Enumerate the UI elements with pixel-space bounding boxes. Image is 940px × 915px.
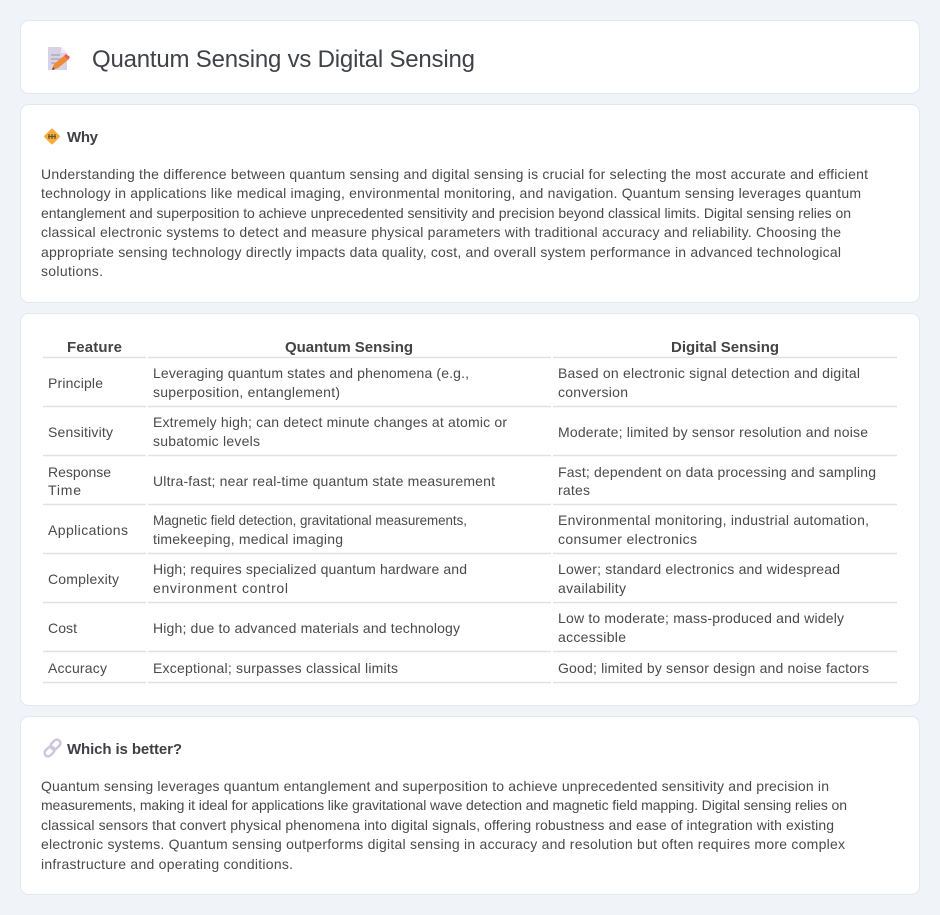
row: principle [48, 365, 860, 400]
row: accuracy: Good; limited by sensor design and noise factors [558, 660, 869, 676]
row: applications [48, 512, 869, 547]
row: applications: Applications [48, 522, 128, 538]
text block: which is better paragraph: measurements, making it ideal for applications like gravitational wave detection and magnetic field mapping. Digital sensing relies on [41, 797, 847, 813]
row: applications: consumer electronics [558, 531, 697, 547]
row: accuracy [48, 660, 869, 676]
icon: memo with pencil [48, 47, 70, 70]
text block: which is better paragraph [41, 778, 847, 872]
row: cost: Low to moderate; mass-produced and widely [558, 610, 844, 626]
row: applications: timekeeping, medical imaging [153, 531, 343, 547]
row: response time: Fast; dependent on data processing and sampling [558, 464, 876, 480]
row: principle: conversion [558, 384, 628, 400]
text block: why paragraph [41, 166, 868, 279]
table header: Feature [67, 339, 122, 356]
row: complexity [48, 561, 840, 596]
row: principle: superposition, entanglement) [153, 384, 340, 400]
icon: link [43, 738, 62, 758]
row: complexity: availability [558, 580, 626, 596]
heading: why: Why [67, 129, 99, 146]
row: response time: Time [48, 482, 81, 498]
text block: why paragraph: solutions. [41, 263, 103, 279]
row: accuracy: Exceptional; surpasses classical limits [153, 660, 398, 676]
text block: which is better paragraph: classical sensors that convert physical phenomena into digital signals, offering robustness and ease of integration with existing [41, 817, 834, 833]
row: sensitivity: Sensitivity [48, 424, 113, 440]
row: cost [48, 610, 844, 645]
text block: why paragraph: entanglement and superposition to achieve unprecedented sensitivity and precision beyond classical limits. Digital sensing relies on [41, 205, 851, 221]
row: sensitivity [48, 414, 868, 449]
row: response time [48, 464, 876, 498]
row: principle: Leveraging quantum states and phenomena (e.g., [153, 365, 469, 381]
row: principle: Principle [48, 375, 103, 391]
table rules [43, 358, 897, 682]
row: cost: High; due to advanced materials and technology [153, 620, 460, 636]
row: response time: Ultra-fast; near real-time quantum state measurement [153, 473, 495, 489]
panel: which is better [20, 716, 920, 894]
row: accuracy: Accuracy [48, 660, 107, 676]
row: response time: rates [558, 482, 590, 498]
panel: why [20, 104, 920, 302]
icon: warning diamond [44, 128, 60, 145]
panel: title [20, 20, 920, 94]
text block: why paragraph: technology in applications like medical imaging, environmental monitoring, and navigation. Quantum sensing leverages quantum [41, 185, 861, 201]
row: applications: Environmental monitoring, industrial automation, [558, 512, 869, 528]
text block: which is better paragraph: infrastructure and operating conditions. [41, 856, 293, 872]
row: complexity: High; requires specialized quantum hardware and [153, 561, 467, 577]
row: principle: Based on electronic signal detection and digital [558, 365, 860, 381]
heading: page title: Quantum Sensing vs Digital Sensing [92, 46, 475, 73]
row: complexity: environment control [153, 580, 288, 596]
row: complexity: Complexity [48, 571, 119, 587]
row: cost: accessible [558, 629, 626, 645]
table header: Quantum Sensing [285, 339, 413, 356]
table header: Digital Sensing [671, 339, 779, 356]
text block: why paragraph: appropriate sensing technology directly impacts data quality, cost, and overall system performance in advanced technological [41, 244, 841, 260]
text block: why paragraph: classical electronic systems to detect and measure physical parameters with traditional accuracy and reliability. Choosing the [41, 224, 841, 240]
row: cost: Cost [48, 620, 77, 636]
row: complexity: Lower; standard electronics and widespread [558, 561, 840, 577]
table header [67, 339, 779, 356]
row: sensitivity: Extremely high; can detect minute changes at atomic or [153, 414, 507, 430]
heading: which is better: Which is better? [67, 741, 182, 758]
row: applications: Magnetic field detection, gravitational measurements, [153, 513, 467, 528]
text block: which is better paragraph: electronic systems. Quantum sensing outperforms digital sensing in accuracy and resolution but often requires more complex [41, 836, 845, 852]
text block: which is better paragraph: Quantum sensing leverages quantum entanglement and superposition to achieve unprecedented sensitivity and precision in [41, 778, 829, 794]
panel: comparison table [20, 314, 920, 706]
row: response time: Response [48, 464, 111, 480]
row: sensitivity: subatomic levels [153, 433, 260, 449]
row: sensitivity: Moderate; limited by sensor resolution and noise [558, 424, 868, 440]
text block: why paragraph: Understanding the difference between quantum sensing and digital sensing is crucial for selecting the most accurate and efficient [41, 166, 868, 182]
